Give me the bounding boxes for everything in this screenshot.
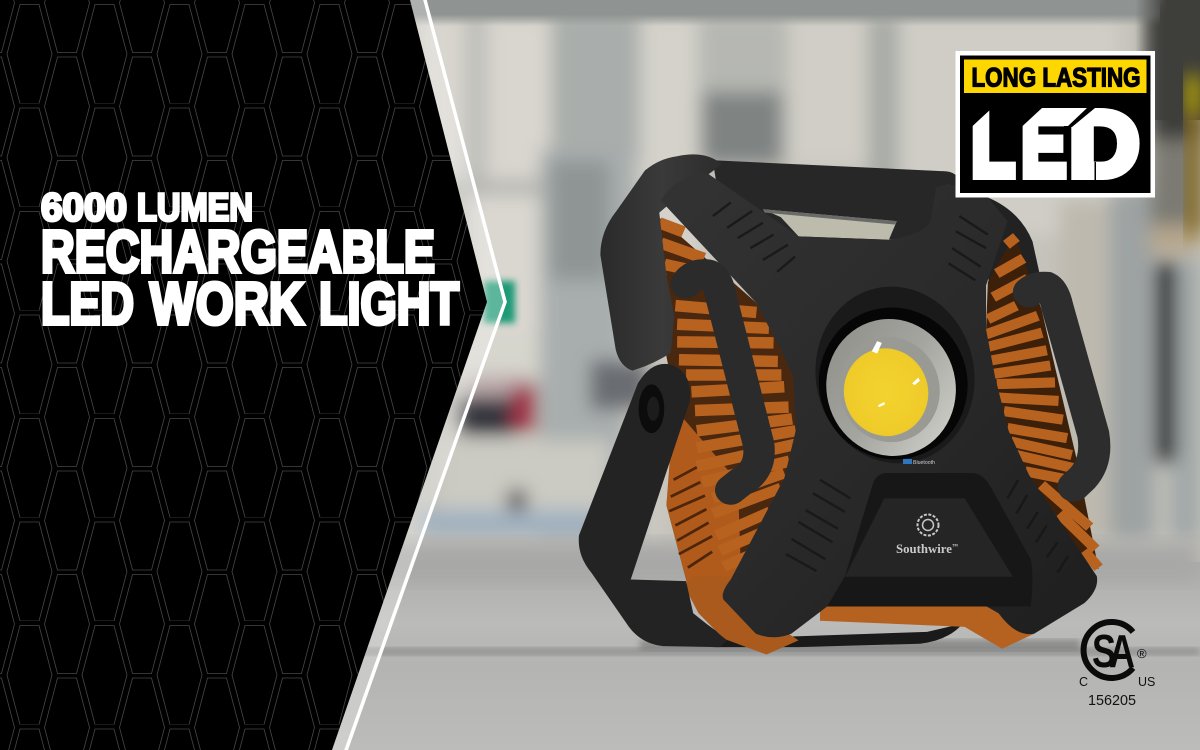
Southwire logo: Southwire xyxy=(896,542,952,556)
CSA certification mark: A xyxy=(1109,625,1135,677)
yellow banner xyxy=(964,60,1146,93)
left front handle xyxy=(686,274,759,490)
title: WORK xyxy=(150,271,304,337)
CSA certification mark: ® xyxy=(1137,646,1147,661)
left bumper xyxy=(600,154,722,371)
title: 6000 xyxy=(41,186,127,230)
rear stand bar xyxy=(691,613,963,647)
title xyxy=(41,186,459,337)
product: rechargeable LED work light xyxy=(579,154,1099,655)
LED wordmark: D xyxy=(1069,92,1140,196)
folding stand arm xyxy=(579,364,727,647)
title: LED xyxy=(41,271,134,337)
title: LIGHT xyxy=(319,271,459,337)
orange base rim xyxy=(684,576,1034,655)
Southwire logo xyxy=(896,514,958,556)
CSA certification mark xyxy=(1079,622,1155,709)
right cooling fins xyxy=(984,235,1099,569)
blurred warehouse background xyxy=(400,0,1200,750)
bottom plate xyxy=(827,473,1032,607)
LED wordmark: L xyxy=(971,92,1015,196)
body grip ridges xyxy=(713,203,1068,573)
CSA certification mark: S xyxy=(1092,625,1116,677)
title: RECHARGEABLE xyxy=(41,219,435,285)
CSA certification mark: C xyxy=(1079,675,1088,689)
left cooling fins xyxy=(657,216,827,593)
LED wordmark: E xyxy=(1021,92,1066,196)
CSA certification mark: 156205 xyxy=(1088,693,1136,709)
banner text: LONG LASTING xyxy=(972,63,1140,93)
Bluetooth mark: Bluetooth xyxy=(913,460,935,466)
black title panel with hexagon pattern xyxy=(0,0,505,750)
white chevron line xyxy=(344,0,507,750)
Long Lasting LED badge xyxy=(956,51,1155,198)
rear handle and window xyxy=(713,160,961,241)
concrete floor xyxy=(300,542,1200,750)
right front handle xyxy=(1029,287,1094,487)
CSA certification mark: US xyxy=(1138,675,1155,689)
Bluetooth mark xyxy=(903,459,935,466)
right bumper xyxy=(981,197,1041,329)
main X-shaped body xyxy=(661,172,1097,637)
LED wordmark xyxy=(968,92,1140,196)
lens assembly xyxy=(803,277,987,473)
title: LUMEN xyxy=(137,186,253,230)
Southwire logo: ™ xyxy=(952,544,958,550)
